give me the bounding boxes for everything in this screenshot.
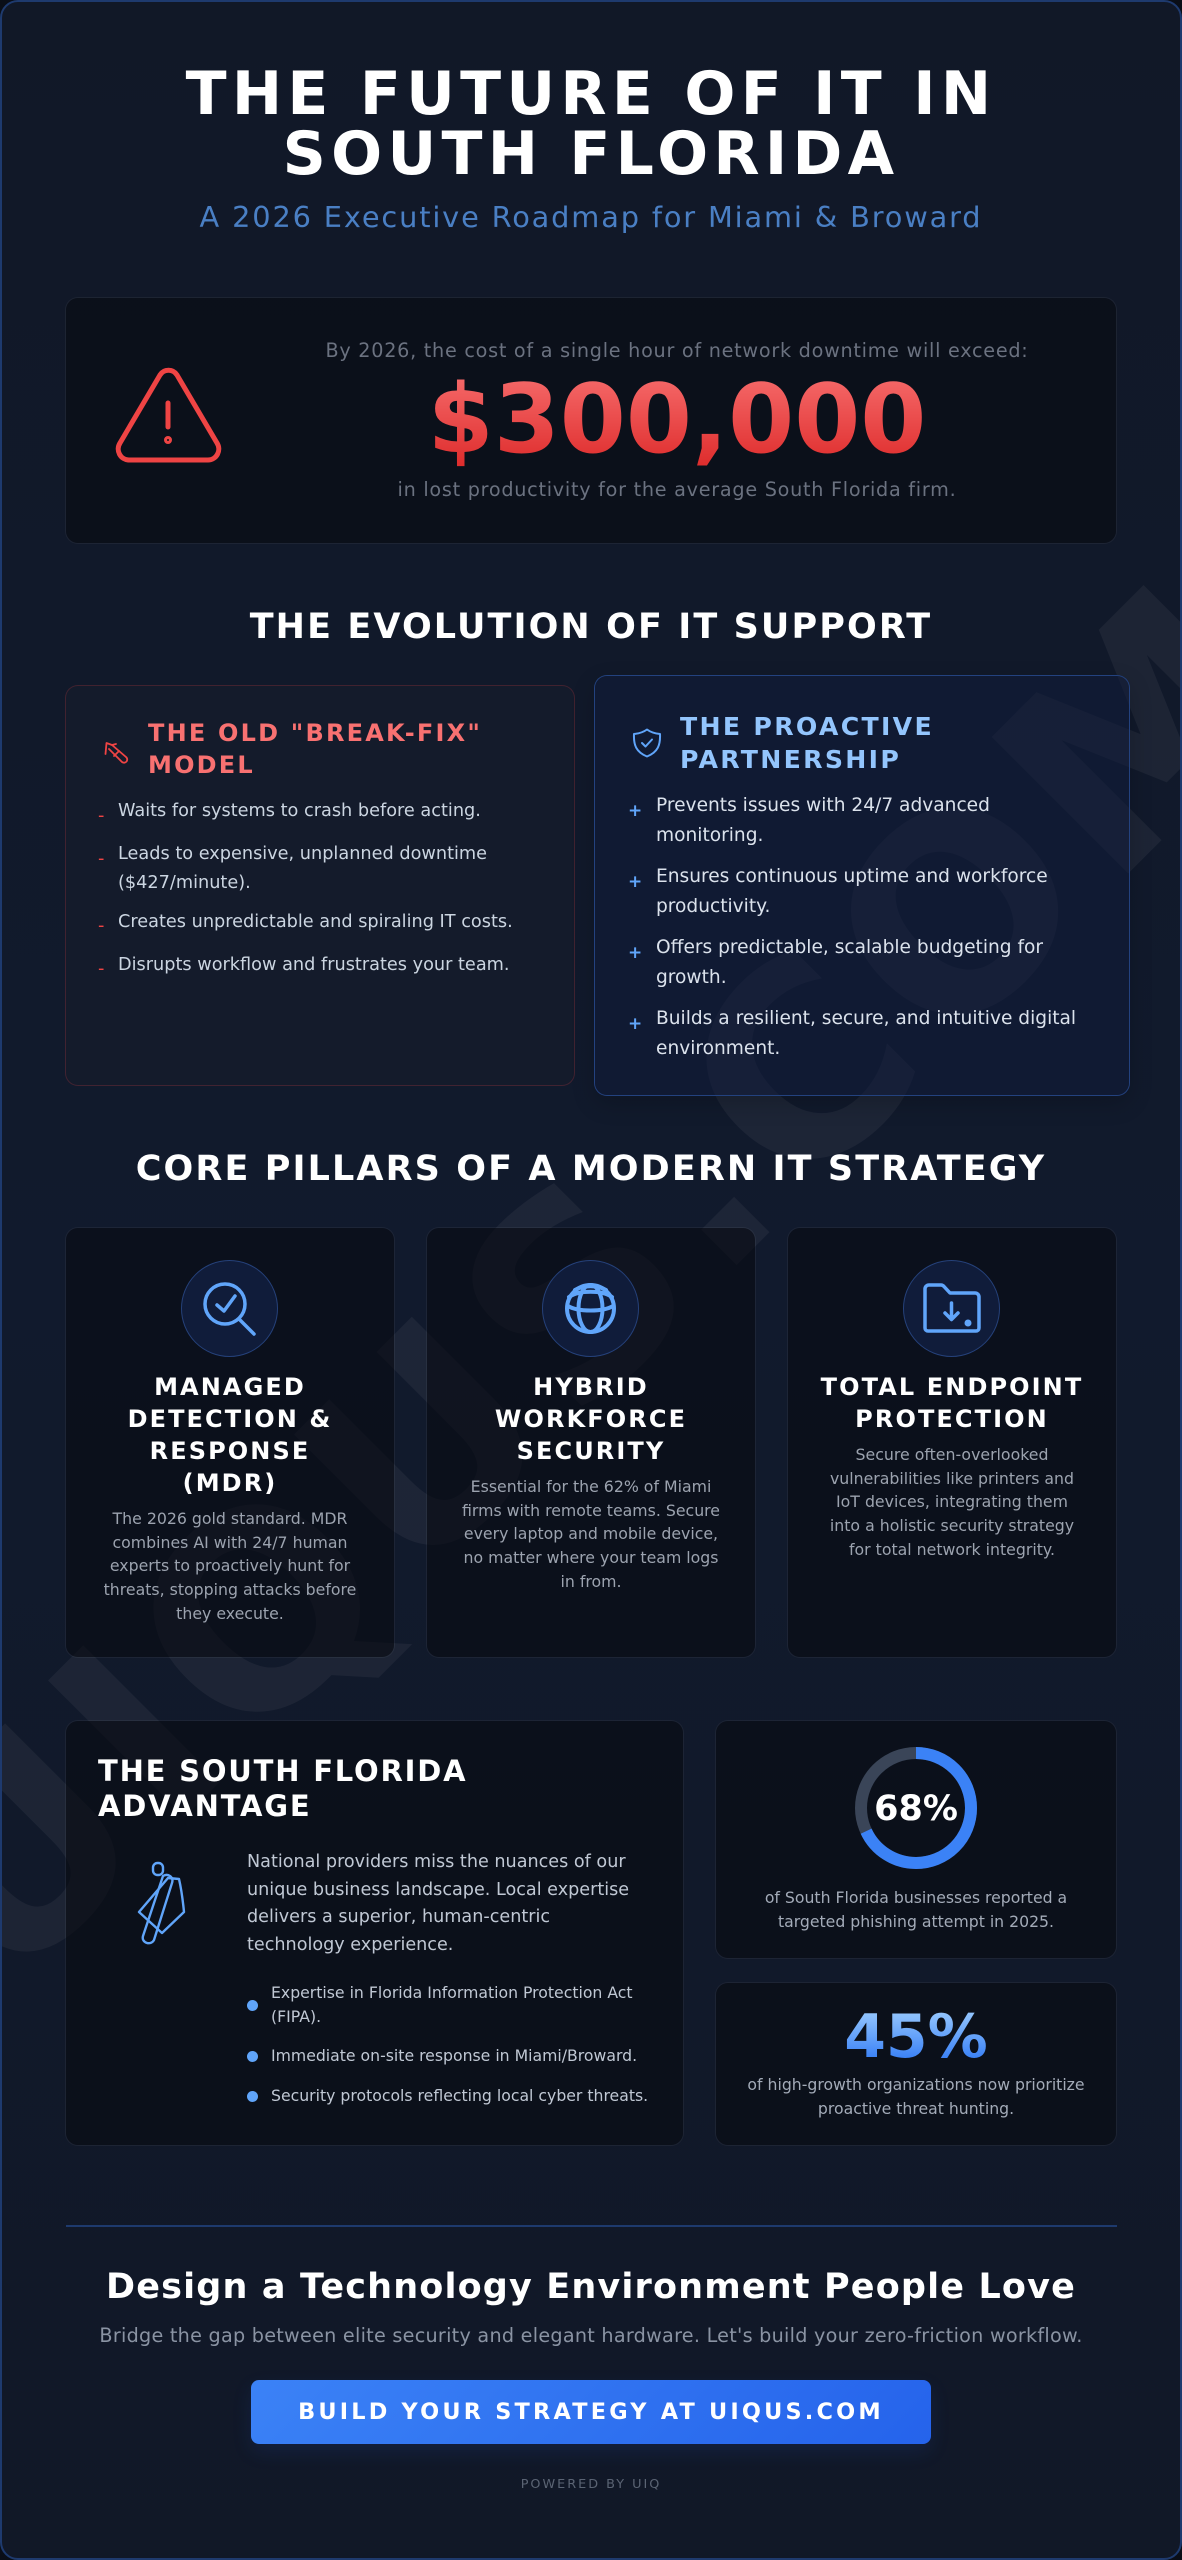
heading: proactive <box>680 712 934 774</box>
title: THE FUTURE OF IT IN <box>186 59 996 129</box>
cost caption: in lost productivity for the average South Florida firm. <box>398 478 956 501</box>
text: MDR: threats, stopping attacks before <box>104 1580 356 1599</box>
panel: endpoint pillar <box>788 1228 1116 1657</box>
heading: MDR: MANAGED <box>154 1373 306 1401</box>
list: break-fix drawbacks: - <box>98 959 104 979</box>
text: MDR: The 2026 gold standard. MDR <box>113 1509 347 1528</box>
text: endpoint: for total network integrity. <box>849 1540 1055 1559</box>
list: break-fix drawbacks: - <box>98 849 104 869</box>
caption: threat hunting: of high-growth organizations now prioritize <box>747 2075 1085 2094</box>
heading: MDR: RESPONSE <box>150 1437 310 1465</box>
text: hybrid: Essential for the 62% of Miami <box>471 1477 711 1496</box>
list: proactive benefits: growth. <box>656 966 727 988</box>
list: proactive benefits: Builds a resilient, secure, and intuitive digital <box>656 1008 1076 1029</box>
panel: proactive partnership <box>595 676 1129 1095</box>
list: proactive benefits: monitoring. <box>656 824 763 846</box>
panel: downtime cost <box>66 298 1116 543</box>
cost lead-in: By 2026, the cost of a single hour of network downtime will exceed: <box>325 339 1029 362</box>
text: endpoint: Secure often-overlooked <box>856 1445 1048 1464</box>
panel: phishing stat <box>716 1721 1116 1958</box>
list: break-fix drawbacks: - <box>98 806 104 826</box>
list: advantage points: Expertise in Florida Information Protection Act <box>271 1983 633 2002</box>
cost figure <box>277 364 1077 476</box>
heading: MDR: (MDR) <box>183 1469 277 1497</box>
caption: phishing: of South Florida businesses reported a <box>765 1888 1067 1907</box>
heading: MDR: DETECTION & <box>128 1405 332 1433</box>
list: advantage points: Immediate on-site response in Miami/Broward. <box>271 2046 637 2065</box>
title: SOUTH FLORIDA <box>283 119 899 189</box>
heading: core pillars: CORE PILLARS OF A MODERN IT STRATEGY <box>136 1149 1046 1189</box>
heading: break-fix <box>148 719 482 779</box>
cost figure: $300,000 <box>428 365 926 475</box>
title <box>186 59 996 189</box>
panel: south florida advantage <box>66 1721 683 2145</box>
list: break-fix drawbacks: Disrupts workflow and frustrates your team. <box>118 955 510 975</box>
caption: phishing <box>765 1888 1067 1931</box>
list: proactive benefits: + <box>628 943 642 963</box>
icon: warning triangle <box>116 368 222 462</box>
list: proactive benefits: + <box>628 872 642 892</box>
list: break-fix drawbacks: Leads to expensive, unplanned downtime <box>118 844 487 864</box>
heading: advantage <box>98 1754 467 1823</box>
list: advantage points <box>247 1983 648 2105</box>
list: proactive benefits: Ensures continuous uptime and workforce <box>656 866 1048 887</box>
text: MDR: experts to proactively hunt for <box>110 1556 350 1575</box>
list: advantage points: Security protocols reflecting local cyber threats. <box>271 2086 648 2105</box>
donut chart: 68 percent <box>855 1747 977 1869</box>
text: call to action: Bridge the gap between elite security and elegant hardware. Let's build your zero-friction workflow. <box>99 2324 1083 2347</box>
icon: broken tool <box>104 742 128 764</box>
text: endpoint: IoT devices, integrating them <box>836 1492 1068 1511</box>
heading: hybrid: HYBRID <box>533 1373 649 1401</box>
list: proactive benefits: + <box>628 801 642 821</box>
donut chart: 68 percent: 68% <box>874 1789 958 1829</box>
text: advantage <box>247 1852 629 1954</box>
heading: hybrid: SECURITY <box>517 1437 665 1465</box>
list: proactive benefits: Prevents issues with 24/7 advanced <box>656 795 990 816</box>
heading: hybrid: WORKFORCE <box>495 1405 687 1433</box>
heading: evolution: THE EVOLUTION OF IT SUPPORT <box>250 607 932 647</box>
list: break-fix drawbacks: - <box>98 916 104 936</box>
text: hybrid: in from. <box>560 1572 622 1591</box>
panel: break-fix model <box>66 686 574 1085</box>
list: break-fix drawbacks: ($427/minute). <box>118 872 251 892</box>
text: MDR: combines AI with 24/7 human <box>112 1533 348 1552</box>
text: hybrid: firms with remote teams. Secure <box>462 1501 720 1520</box>
heading: hybrid <box>495 1373 687 1465</box>
heading: endpoint: PROTECTION <box>855 1405 1049 1433</box>
heading: advantage: THE SOUTH FLORIDA <box>98 1754 467 1788</box>
text: MDR: they execute. <box>176 1604 284 1623</box>
list: advantage points: (FIPA). <box>271 2007 321 2026</box>
text: advantage: technology experience. <box>247 1934 453 1954</box>
panel: threat hunting stat <box>716 1983 1116 2145</box>
text: MDR <box>104 1509 356 1623</box>
heading: endpoint: TOTAL ENDPOINT <box>821 1373 1083 1401</box>
heading: endpoint <box>820 1373 1083 1433</box>
stat: 45 percent: 45% <box>844 2002 988 2072</box>
list: proactive benefits: environment. <box>656 1038 780 1058</box>
list: proactive benefits <box>628 795 1076 1058</box>
panel: hybrid pillar <box>427 1228 755 1657</box>
heading: advantage: ADVANTAGE <box>98 1789 312 1823</box>
list: break-fix drawbacks <box>98 801 513 979</box>
text: hybrid: every laptop and mobile device, <box>464 1524 718 1543</box>
heading: break-fix: MODEL <box>148 751 255 779</box>
list: proactive benefits: Offers predictable, scalable budgeting for <box>656 937 1043 958</box>
list: proactive benefits: + <box>628 1014 642 1034</box>
caption: threat hunting: proactive threat hunting. <box>818 2099 1014 2118</box>
stat: 45 percent <box>716 2002 1116 2072</box>
caption: threat hunting <box>747 2075 1085 2118</box>
text: endpoint <box>830 1445 1074 1559</box>
list: break-fix drawbacks: Creates unpredictable and spiraling IT costs. <box>118 912 513 932</box>
icon: shield check <box>632 728 662 758</box>
footer credit: POWERED BY UIQ <box>521 2477 661 2492</box>
heading: proactive: THE PROACTIVE <box>680 712 934 741</box>
button <box>251 2380 931 2444</box>
icon: folder download <box>903 1260 1000 1357</box>
list: proactive benefits: productivity. <box>656 896 770 916</box>
text: advantage: National providers miss the nuances of our <box>247 1852 626 1872</box>
panel: MDR pillar <box>66 1228 394 1657</box>
heading: call to action: Design a Technology Environment People Love <box>106 2267 1076 2307</box>
heading: MDR <box>128 1373 332 1497</box>
icon: globe <box>542 1260 639 1357</box>
heading: break-fix: THE OLD "BREAK-FIX" <box>148 719 482 747</box>
icon: abstract figure <box>138 1862 186 1944</box>
list: break-fix drawbacks: Waits for systems to crash before acting. <box>118 801 481 821</box>
text: hybrid: no matter where your team logs <box>463 1548 719 1567</box>
button: BUILD YOUR STRATEGY AT UIQUS.COM <box>298 2399 884 2425</box>
text: advantage: delivers a superior, human-centric <box>247 1907 550 1927</box>
caption: phishing: targeted phishing attempt in 2025. <box>778 1912 1054 1931</box>
text: hybrid <box>462 1477 720 1591</box>
heading: proactive: PARTNERSHIP <box>680 745 901 774</box>
text: advantage: unique business landscape. Local expertise <box>247 1880 629 1900</box>
text: endpoint: into a holistic security strategy <box>830 1516 1074 1535</box>
subtitle: A 2026 Executive Roadmap for Miami & Broward <box>200 200 982 234</box>
text: endpoint: vulnerabilities like printers and <box>830 1469 1074 1488</box>
icon: magnifier check <box>181 1260 278 1357</box>
